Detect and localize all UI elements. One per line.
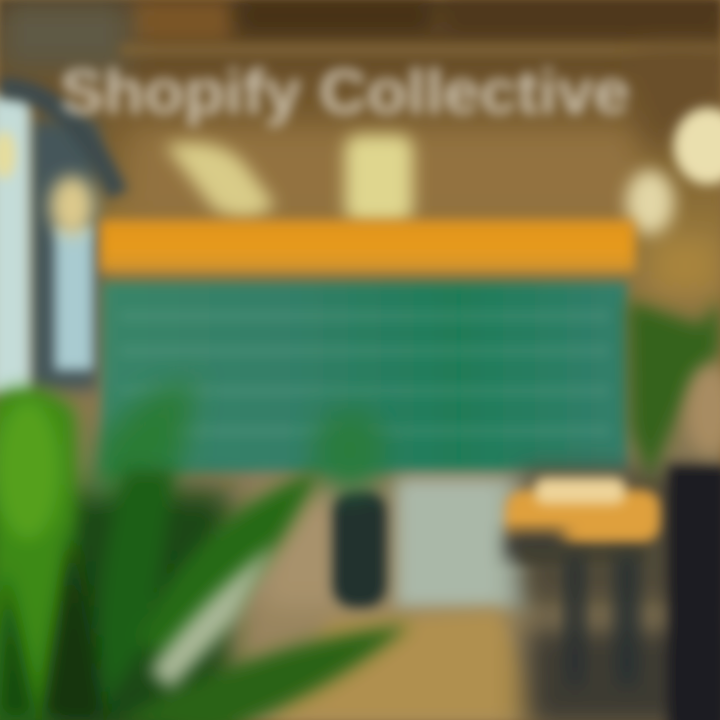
plant on the right — [628, 300, 720, 480]
title text: Shopify Collective — [60, 58, 630, 127]
ceiling lights — [165, 108, 720, 234]
table and chairs on the right — [505, 465, 720, 720]
potted plant in the centre — [314, 408, 387, 608]
green table panel — [102, 282, 627, 472]
orange header band — [100, 220, 635, 272]
floor — [270, 610, 720, 720]
lower wall and door — [260, 470, 720, 610]
large foreground plant — [0, 380, 410, 720]
window on the left — [0, 88, 118, 395]
